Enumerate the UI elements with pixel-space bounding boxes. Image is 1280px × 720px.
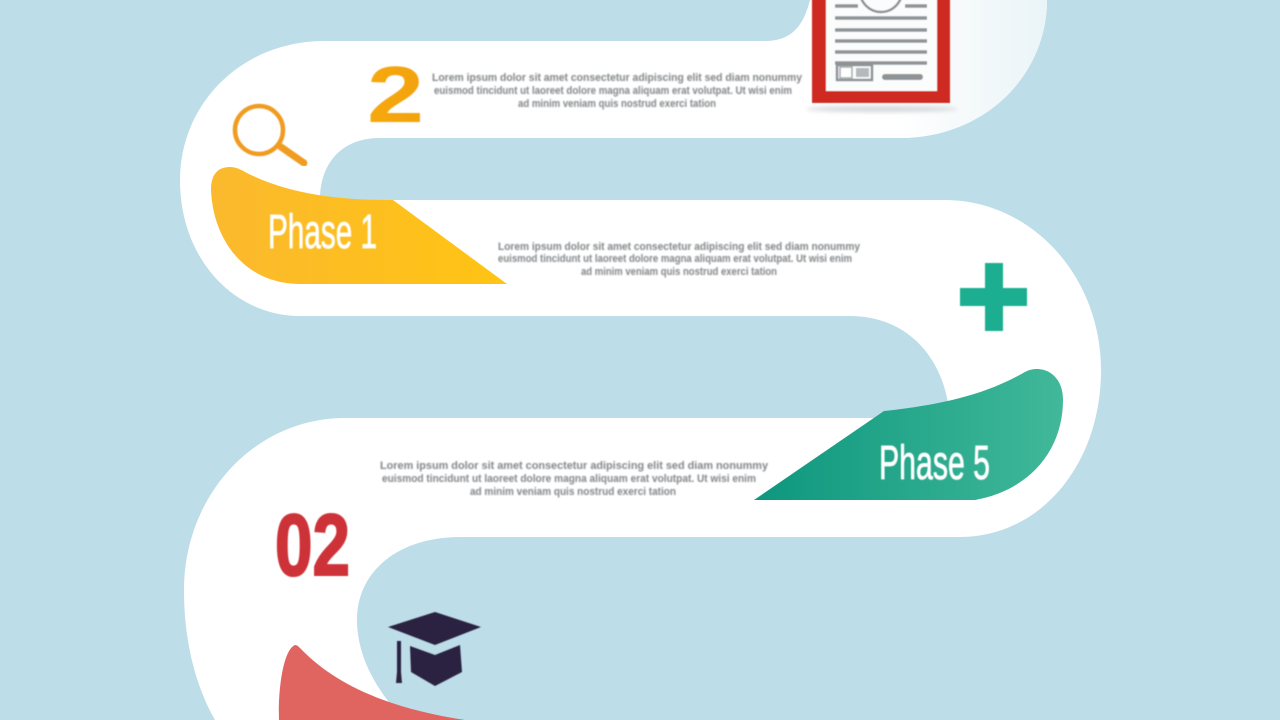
icon: document	[806, 0, 958, 112]
icon: magnifying glass	[235, 106, 304, 163]
text block: middle band	[498, 241, 861, 278]
text block: lower band: euismod tincidunt ut laoreet dolore magna aliquam erat volutpat. Ut wisi enim	[382, 473, 756, 485]
icon: plus	[960, 263, 1027, 331]
text block: top band: euismod tincidunt ut laoreet dolore magna aliquam erat volutpat. Ut wisi enim	[434, 85, 792, 97]
text block: lower band	[380, 460, 769, 498]
phase 1 banner	[211, 167, 507, 284]
phase banner: red, cropped	[279, 645, 465, 720]
text block: middle band: Lorem ipsum dolor sit amet consectetur adipiscing elit sed diam nonummy	[498, 241, 861, 253]
phase 1 banner: Phase 1	[268, 206, 377, 259]
number: 02: 02	[275, 497, 350, 594]
phase 5 banner: Phase 5	[879, 437, 990, 490]
text block: top band	[432, 72, 803, 110]
text block: middle band: ad minim veniam quis nostrud exerci tation	[581, 266, 777, 278]
winding white road	[180, 0, 1101, 720]
icon: graduation cap	[388, 612, 481, 686]
text block: top band: ad minim veniam quis nostrud exerci tation	[518, 98, 716, 110]
number: 2: 2	[367, 50, 424, 139]
text block: middle band: euismod tincidunt ut laoreet dolore magna aliquam erat volutpat. Ut wisi enim	[498, 253, 852, 265]
phase 5 banner	[754, 369, 1063, 500]
text block: top band: Lorem ipsum dolor sit amet consectetur adipiscing elit sed diam nonummy	[432, 72, 803, 84]
text block: lower band: Lorem ipsum dolor sit amet consectetur adipiscing elit sed diam nonummy	[380, 460, 769, 472]
text block: lower band: ad minim veniam quis nostrud exerci tation	[470, 486, 676, 498]
